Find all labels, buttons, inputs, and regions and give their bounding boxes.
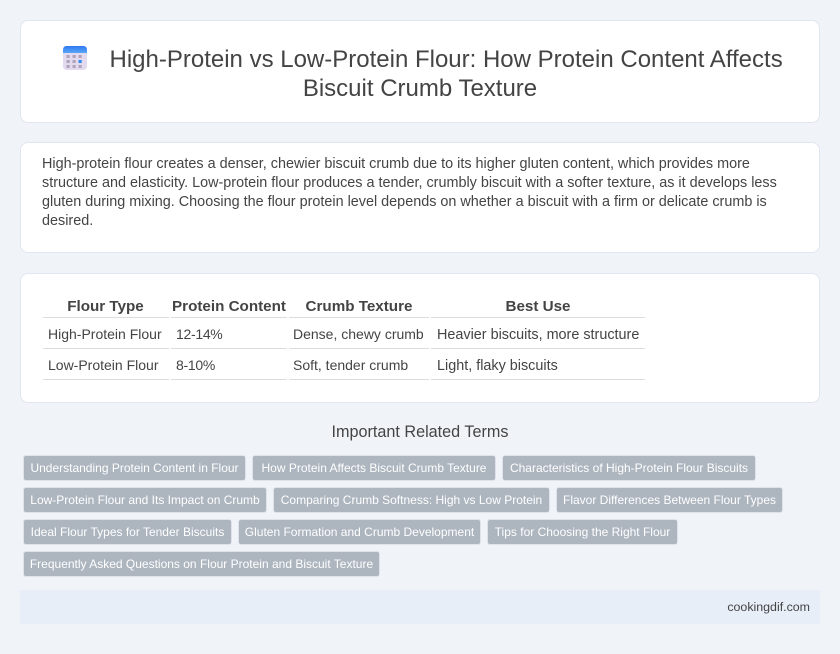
related terms tags: How Protein Affects Biscuit Crumb Texture	[262, 461, 486, 475]
related terms tags: Ideal Flour Types for Tender Biscuits	[31, 525, 224, 539]
related terms tags: Understanding Protein Content in Flour	[30, 461, 239, 475]
related terms tags: Flavor Differences Between Flour Types	[563, 493, 776, 507]
footer source text: cookingdif.com	[727, 600, 810, 614]
comparison table: Dense, chewy crumb	[293, 326, 424, 342]
related terms tags: Tips for Choosing the Right Flour	[495, 525, 670, 539]
title: High-Protein vs Low-Protein Flour: How Protein Content Affects	[110, 46, 783, 73]
comparison table: Heavier biscuits, more structure	[437, 327, 639, 343]
comparison table: Soft, tender crumb	[293, 357, 408, 373]
comparison table: Protein Content	[172, 298, 286, 315]
intro text	[42, 156, 777, 229]
header panel	[20, 20, 820, 123]
related terms tags: Comparing Crumb Softness: High vs Low Protein	[281, 493, 542, 507]
panel: comparison table	[20, 273, 820, 403]
related terms tags: Gluten Formation and Crumb Development	[245, 525, 474, 539]
title	[110, 46, 783, 102]
related terms heading: Important Related Terms	[332, 423, 508, 441]
intro text: gluten during mixing. Choosing the flour protein level depends on whether a biscuit with a firm or delicate crumb is	[42, 194, 767, 210]
icon: calendar	[63, 46, 87, 70]
panel: intro paragraph	[20, 142, 820, 253]
title: Biscuit Crumb Texture	[303, 75, 537, 102]
footer bar	[20, 590, 820, 624]
comparison table: High-Protein Flour	[48, 326, 162, 342]
comparison table: Low-Protein Flour	[48, 357, 158, 373]
related terms tags	[23, 455, 783, 577]
intro text: High-protein flour creates a denser, chewier biscuit crumb due to its higher gluten content, which provides more	[42, 156, 750, 172]
intro text: desired.	[42, 213, 93, 229]
intro text: structure and elasticity. Low-protein flour produces a tender, crumbly biscuit with a softer texture, as it develops less	[42, 175, 777, 191]
comparison table: Best Use	[506, 298, 570, 315]
comparison table: Crumb Texture	[306, 298, 412, 315]
related terms tags: Characteristics of High-Protein Flour Biscuits	[510, 461, 748, 475]
comparison table: 8-10%	[176, 357, 215, 373]
comparison table: Light, flaky biscuits	[437, 358, 558, 374]
comparison table: 12-14%	[176, 326, 222, 342]
comparison table: Flour Type	[67, 298, 144, 315]
related terms tags: Low-Protein Flour and Its Impact on Crumb	[30, 493, 260, 507]
comparison table	[43, 298, 645, 380]
related terms tags: Frequently Asked Questions on Flour Protein and Biscuit Texture	[30, 557, 373, 571]
